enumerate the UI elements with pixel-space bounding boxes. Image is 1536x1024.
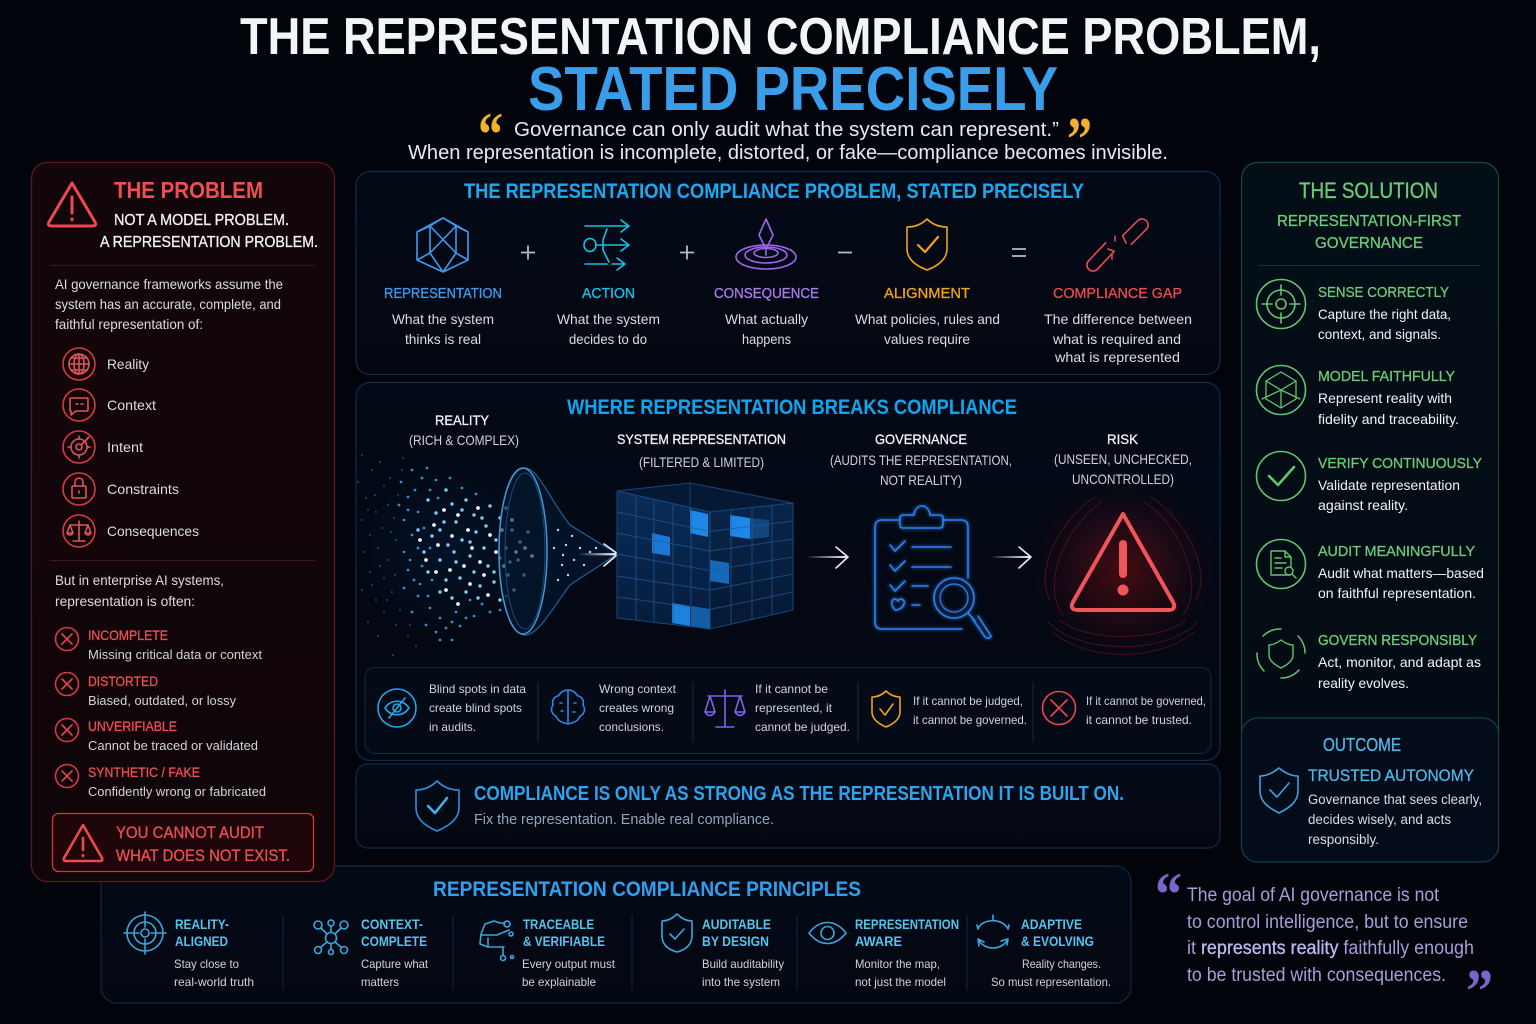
takeaway: judged: [705, 682, 850, 734]
takeaway: judged: represented, it: [755, 701, 833, 715]
panel: formula: [356, 172, 1220, 374]
stage label: system representation: (FILTERED & LIMITED): [639, 454, 764, 470]
failure: incomplete: [56, 627, 262, 662]
title: THE REPRESENTATION COMPLIANCE PROBLEM,: [240, 8, 1321, 66]
panel: compliance takeaway: [356, 764, 1220, 848]
step: verify: VERIFY CONTINUOUSLY: [1318, 455, 1482, 472]
title: STATED PRECISELY: [528, 55, 1058, 124]
term: action: What the system: [557, 311, 660, 327]
icon: warning triangle: [48, 183, 96, 226]
closing quote: it represents reality faithfully enough: [1187, 938, 1474, 959]
problem intro text: faithful representation of:: [55, 316, 203, 332]
takeaway: blind spots: [378, 682, 526, 734]
principle: auditable: BY DESIGN: [702, 934, 769, 949]
closing quote: [1155, 861, 1493, 1024]
outcome card: TRUSTED AUTONOMY: [1308, 766, 1474, 785]
item: consequences: [63, 515, 199, 547]
solution heading: [1277, 178, 1461, 252]
step: govern: [1257, 629, 1481, 691]
takeaway: blind spots: create blind spots: [429, 701, 522, 715]
takeaway: trusted: If it cannot be governed,: [1086, 694, 1206, 708]
panel: where representation breaks: [355, 382, 1220, 760]
arrow: into cube: [578, 544, 618, 566]
term: consequence: CONSEQUENCE: [714, 285, 819, 302]
stage label: governance: (AUDITS THE REPRESENTATION,: [830, 452, 1012, 468]
solution heading: REPRESENTATION-FIRST: [1277, 213, 1461, 230]
takeaway: wrong context: [552, 682, 677, 734]
closing quote: The goal of AI governance is not: [1187, 885, 1440, 906]
failure: unverifiable: Cannot be traced or validated: [88, 738, 258, 753]
takeaway headline: [474, 783, 1124, 828]
principle: traceable: & VERIFIABLE: [523, 934, 605, 949]
term: action: ACTION: [582, 285, 635, 302]
principle: reality-aligned: Stay close to: [174, 957, 239, 971]
illustration: reality data particles: [355, 455, 545, 655]
term: compliance gap: COMPLIANCE GAP: [1053, 285, 1182, 302]
step: sense: SENSE CORRECTLY: [1318, 284, 1449, 301]
panel: principles: [101, 866, 1131, 1003]
outcome card: OUTCOME: [1323, 735, 1401, 755]
term: alignment: [855, 219, 1000, 347]
principles heading: REPRESENTATION COMPLIANCE PRINCIPLES: [433, 878, 861, 901]
term: compliance gap: [1044, 219, 1192, 365]
principle: auditable: Build auditability: [702, 957, 784, 971]
stage label: reality: REALITY: [435, 412, 490, 428]
takeaway: trusted: it cannot be trusted.: [1086, 713, 1192, 727]
often text: But in enterprise AI systems,: [55, 572, 224, 588]
outcome card: [1242, 718, 1498, 862]
principle: context-complete: CONTEXT-: [361, 917, 423, 932]
item: intent: [63, 431, 143, 463]
term: compliance gap: what is required and: [1052, 331, 1181, 347]
principle: representation aware: REPRESENTATION: [855, 917, 959, 932]
stage label: governance: [830, 431, 1012, 488]
stage label: risk: (UNSEEN, UNCHECKED,: [1054, 451, 1192, 467]
step: audit: Audit what matters—based: [1318, 565, 1484, 581]
formula heading: THE REPRESENTATION COMPLIANCE PROBLEM, STATED PRECISELY: [464, 180, 1084, 203]
stage label: reality: (RICH & COMPLEX): [409, 432, 519, 448]
principle: representation aware: not just the model: [855, 975, 946, 989]
stage label: reality: [409, 412, 519, 448]
principle: context-complete: matters: [361, 975, 399, 989]
failure: unverifiable: UNVERIFIABLE: [88, 718, 177, 734]
takeaway: blind spots: Blind spots in data: [429, 682, 526, 696]
principle: adaptive: So must representation.: [991, 975, 1111, 989]
closing quote: to be trusted with consequences.: [1187, 965, 1446, 986]
icon: outcome shield: [1260, 768, 1298, 813]
term: consequence: What actually: [725, 311, 808, 327]
step: model: MODEL FAITHFULLY: [1318, 368, 1455, 385]
problem intro text: AI governance frameworks assume the: [55, 276, 283, 292]
closing quote: to control intelligence, but to ensure: [1187, 912, 1468, 933]
step: model: [1256, 366, 1459, 427]
solution heading: GOVERNANCE: [1315, 235, 1423, 252]
solution heading: THE SOLUTION: [1299, 178, 1438, 203]
term: action: decides to do: [569, 331, 647, 347]
term: representation: [384, 218, 502, 347]
outcome card: Governance that sees clearly,: [1308, 792, 1482, 807]
assumption list: [63, 348, 199, 547]
icon: shield: [416, 781, 459, 831]
illustration: data cube: [617, 483, 793, 629]
often text: representation is often:: [55, 593, 195, 609]
step: model: fidelity and traceability.: [1318, 411, 1459, 427]
term: alignment: What policies, rules and: [855, 311, 1000, 327]
principle: adaptive: Reality changes.: [1022, 957, 1101, 971]
failure: synthetic: SYNTHETIC / FAKE: [88, 764, 200, 780]
illustration: funnel lens: [499, 468, 614, 635]
quote subtitle: [408, 101, 1168, 174]
failure: synthetic: Confidently wrong or fabricated: [88, 784, 266, 799]
term: consequence: happens: [742, 331, 791, 347]
principle: traceable: be explainable: [522, 975, 596, 989]
term: action: [557, 220, 660, 347]
step: sense: Capture the right data,: [1318, 306, 1451, 322]
formula operators: [521, 246, 1026, 260]
step: sense: [1256, 280, 1451, 342]
principle: context-complete: [314, 917, 429, 989]
principle: representation aware: [809, 917, 959, 989]
failure: incomplete: INCOMPLETE: [88, 627, 168, 643]
term: representation: thinks is real: [405, 331, 481, 347]
outcome card: decides wisely, and acts: [1308, 812, 1451, 827]
takeaway: governed: it cannot be governed.: [913, 713, 1027, 727]
quote subtitle: When representation is incomplete, distorted, or fake—compliance becomes invisible.: [408, 142, 1168, 164]
item: constraints: [63, 473, 179, 505]
stage label: risk: [1054, 431, 1192, 487]
item: consequences: Consequences: [107, 523, 199, 539]
item: reality: [63, 348, 149, 380]
principle: traceable: [480, 917, 616, 989]
item: reality: Reality: [107, 356, 149, 372]
problem heading: THE PROBLEM: [114, 177, 263, 203]
term: representation: REPRESENTATION: [384, 285, 502, 302]
term: alignment: values require: [884, 331, 970, 347]
stage label: system representation: [617, 431, 786, 470]
problem heading: [100, 177, 318, 251]
stage label: risk: RISK: [1107, 431, 1139, 447]
takeaway: governed: [872, 691, 1027, 727]
outcome card: responsibly.: [1308, 832, 1379, 847]
closing quote: “: [1155, 861, 1182, 929]
principle: reality-aligned: ALIGNED: [175, 934, 228, 949]
item: context: [63, 389, 156, 421]
illustration: clipboard audit: [875, 506, 991, 638]
problem intro text: system has an accurate, complete, and: [55, 296, 281, 312]
principle: traceable: TRACEABLE: [523, 917, 594, 932]
step: verify: against reality.: [1318, 497, 1408, 513]
step: audit: AUDIT MEANINGFULLY: [1318, 543, 1475, 560]
takeaway headline: COMPLIANCE IS ONLY AS STRONG AS THE REPRESENTATION IT IS BUILT ON.: [474, 783, 1124, 805]
principle: representation aware: AWARE: [855, 934, 902, 949]
quote subtitle: “: [478, 101, 503, 169]
illustration: risk warning: [1029, 478, 1217, 662]
quote subtitle: ”: [1067, 106, 1092, 174]
step: verify: [1256, 452, 1482, 513]
principle: representation aware: Monitor the map,: [855, 957, 940, 971]
failure: unverifiable: [56, 718, 258, 753]
takeaway headline: Fix the representation. Enable real compliance.: [474, 811, 774, 828]
takeaway: wrong context: Wrong context: [599, 682, 677, 696]
stage label: governance: NOT REALITY): [880, 472, 962, 488]
panel: the solution: [1242, 162, 1498, 862]
takeaway: governed: If it cannot be judged,: [913, 694, 1023, 708]
stage label: risk: UNCONTROLLED): [1072, 471, 1174, 487]
panel: the problem: [32, 162, 334, 882]
stage label: system representation: SYSTEM REPRESENTATION: [617, 431, 786, 447]
failure: distorted: [56, 672, 236, 708]
step: govern: GOVERN RESPONSIBLY: [1318, 632, 1477, 649]
principle: adaptive: ADAPTIVE: [1021, 917, 1082, 932]
principle: context-complete: COMPLETE: [361, 934, 427, 949]
step: audit: on faithful representation.: [1318, 585, 1476, 601]
failure: incomplete: Missing critical data or context: [88, 647, 262, 662]
closing quote: ”: [1466, 958, 1493, 1024]
term: representation: What the system: [392, 311, 494, 327]
callout: cannot audit: WHAT DOES NOT EXIST.: [116, 846, 290, 865]
takeaways strip: [365, 668, 1211, 754]
item: intent: Intent: [107, 439, 143, 455]
principle: context-complete: Capture what: [361, 957, 429, 971]
title: [240, 8, 1321, 124]
step: sense: context, and signals.: [1318, 326, 1441, 342]
arrow: to governance: [806, 547, 848, 568]
takeaway: judged: cannot be judged.: [755, 720, 850, 734]
takeaway: wrong context: creates wrong: [599, 701, 674, 715]
failure: distorted: Biased, outdated, or lossy: [88, 693, 236, 708]
step: govern: Act, monitor, and adapt as: [1318, 654, 1481, 670]
term: compliance gap: what is represented: [1054, 349, 1180, 365]
principle: traceable: Every output must: [522, 957, 616, 971]
principle: auditable: AUDITABLE: [702, 917, 771, 932]
problem heading: NOT A MODEL PROBLEM.: [114, 212, 289, 229]
step: model: Represent reality with: [1318, 390, 1452, 406]
principle: reality-aligned: [124, 912, 254, 989]
principle: adaptive: & EVOLVING: [1021, 934, 1094, 949]
problem heading: A REPRESENTATION PROBLEM.: [100, 234, 318, 251]
often text: [55, 572, 224, 609]
problem intro text: [55, 276, 283, 332]
principle: reality-aligned: REALITY-: [175, 917, 229, 932]
stage label: governance: GOVERNANCE: [875, 431, 967, 447]
failure: distorted: DISTORTED: [88, 673, 158, 689]
principle: auditable: into the system: [702, 975, 780, 989]
term: compliance gap: The difference between: [1044, 311, 1192, 327]
quote subtitle: Governance can only audit what the system can represent.”: [514, 119, 1059, 141]
step: verify: Validate representation: [1318, 477, 1460, 493]
principle: auditable: [662, 914, 784, 989]
takeaway: blind spots: in audits.: [429, 720, 476, 734]
arrow: to risk: [990, 547, 1031, 568]
term: consequence: [714, 219, 819, 347]
takeaway: trusted: [1042, 692, 1206, 727]
step: audit: [1256, 540, 1484, 601]
failure: synthetic: [56, 764, 266, 799]
callout: cannot audit: YOU CANNOT AUDIT: [116, 823, 264, 842]
callout: cannot audit: [52, 814, 314, 872]
principle: reality-aligned: real-world truth: [174, 975, 254, 989]
breaks heading: WHERE REPRESENTATION BREAKS COMPLIANCE: [567, 396, 1017, 419]
takeaway: judged: If it cannot be: [755, 682, 828, 696]
step: govern: reality evolves.: [1318, 675, 1409, 691]
item: constraints: Constraints: [107, 481, 179, 497]
item: context: Context: [107, 397, 156, 413]
takeaway: wrong context: conclusions.: [599, 720, 664, 734]
term: alignment: ALIGNMENT: [884, 285, 970, 302]
principle: adaptive: [977, 915, 1111, 989]
